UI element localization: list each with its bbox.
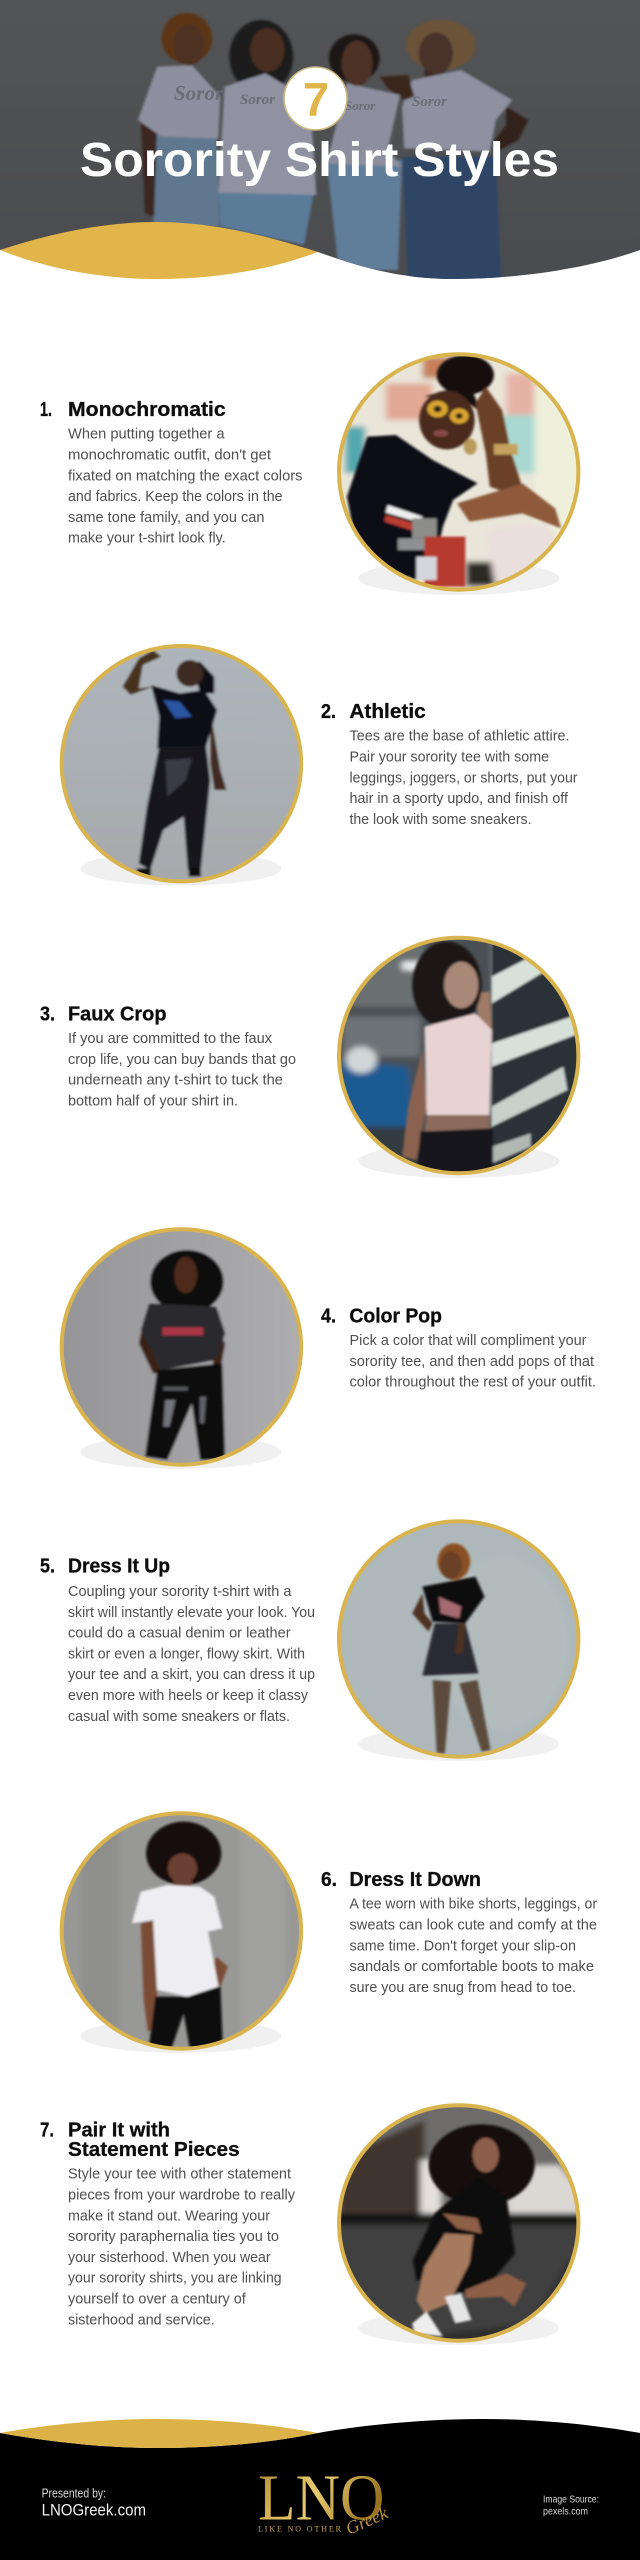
panel: 2 Athletic xyxy=(53,640,578,890)
text block: A tee worn with bike shorts, leggings, or xyxy=(350,1897,597,1913)
text block: sisterhood and service. xyxy=(68,2312,215,2328)
heading: Dress It Down xyxy=(349,1869,481,1891)
shirt lettering xyxy=(174,86,447,110)
panel: 3 Faux Crop xyxy=(40,923,594,1183)
text block: sorority tee, and then add pops of that xyxy=(350,1354,594,1370)
image source: Image Source: xyxy=(543,2494,599,2506)
heading: 4. xyxy=(321,1306,336,1328)
text block: skirt or even a longer, flowy skirt. With xyxy=(68,1646,305,1662)
badge: number 7 xyxy=(284,67,347,130)
heading: Statement Pieces xyxy=(68,2139,240,2161)
panel: 1 Monochromatic xyxy=(40,343,596,600)
text block: sorority paraphernalia ties you to xyxy=(68,2229,279,2245)
text block xyxy=(350,1897,597,1996)
presented by: LNOGreek.com xyxy=(42,2502,146,2520)
shirt lettering: Soror xyxy=(345,98,376,113)
photo: woman flexing xyxy=(53,640,310,890)
text block: monochromatic outfit, don't get xyxy=(68,448,271,464)
heading: Monochromatic xyxy=(68,399,226,421)
heading: Faux Crop xyxy=(68,1004,166,1026)
woman 3 xyxy=(327,34,414,270)
heading: 5. xyxy=(40,1556,55,1578)
shirt lettering: Soror xyxy=(412,94,447,110)
footer panel xyxy=(0,2419,640,2560)
heading: Color Pop xyxy=(349,1306,442,1328)
logo: LNO xyxy=(258,2461,384,2534)
gold wave xyxy=(0,222,318,279)
text block: yourself to over a century of xyxy=(68,2292,247,2308)
text block: Pick a color that will compliment your xyxy=(350,1333,587,1349)
heading xyxy=(40,2120,240,2161)
header photo: four women in shirts xyxy=(0,0,640,290)
title: Sorority Shirt Styles xyxy=(80,134,559,187)
text block: and fabrics. Keep the colors in the xyxy=(68,489,282,505)
text block: bottom half of your shirt in. xyxy=(68,1093,238,1109)
heading: 6. xyxy=(321,1869,337,1891)
photo: woman in fringe skirt xyxy=(337,1519,580,1761)
shirt lettering: Soror xyxy=(240,92,275,108)
text block: even more with heels or keep it classy xyxy=(68,1688,309,1704)
text block xyxy=(68,1031,296,1109)
text block xyxy=(350,729,578,828)
panel: 5 Dress It Up xyxy=(40,1510,596,1767)
text block: same time. Don't forget your slip-on xyxy=(350,1938,576,1954)
text block: your sisterhood. When you wear xyxy=(68,2250,271,2266)
heading: Dress It Up xyxy=(68,1556,170,1578)
woman 1 xyxy=(138,13,220,227)
text block: hair in a sporty updo, and finish off xyxy=(350,791,569,807)
footer gold wave xyxy=(0,2419,318,2448)
heading: 1. xyxy=(40,399,52,421)
text block: sweats can look cute and comfy at the xyxy=(350,1918,597,1934)
panel: 4 Color Pop xyxy=(53,1223,596,1473)
presented by: Presented by: xyxy=(42,2487,106,2501)
text block: pieces from your wardrobe to really xyxy=(68,2188,296,2204)
photo: woman in crop top xyxy=(337,936,580,1178)
text block: your sorority shirts, you are linking xyxy=(68,2271,282,2287)
heading: 7. xyxy=(40,2120,54,2142)
badge: number 7: 7 xyxy=(303,73,329,126)
heading: 3. xyxy=(40,1004,55,1026)
text block xyxy=(68,1584,315,1725)
footer background xyxy=(0,2419,640,2560)
logo: Greek xyxy=(342,2502,392,2539)
heading: 2. xyxy=(321,701,336,723)
text block: Coupling your sorority t-shirt with a xyxy=(68,1584,292,1600)
text block: skirt will instantly elevate your look. You xyxy=(68,1605,315,1621)
text block: Pair your sorority tee with some xyxy=(350,750,549,766)
panel: 7 Pair It with Statement Pieces xyxy=(40,2103,580,2345)
text block: Tees are the base of athletic attire. xyxy=(350,729,570,745)
text block: same tone family, and you can xyxy=(68,510,264,526)
photo: woman in white tee xyxy=(60,1811,304,2053)
photo: woman in sunglasses xyxy=(337,352,580,595)
text block: could do a casual denim or leather xyxy=(68,1626,291,1642)
text block: Style your tee with other statement xyxy=(68,2167,291,2183)
shirt lettering: Soror xyxy=(174,81,224,105)
text block: sandals or comfortable boots to make xyxy=(350,1959,594,1975)
photo: woman crouching in tunnel xyxy=(337,2103,580,2345)
text block: crop life, you can buy bands that go xyxy=(68,1052,296,1068)
text block: color throughout the rest of your outfit. xyxy=(350,1375,596,1391)
text block xyxy=(350,1333,596,1391)
text block xyxy=(68,2167,296,2328)
text block: your tee and a skirt, you can dress it up xyxy=(68,1667,315,1683)
text block: leggings, joggers, or shorts, put your xyxy=(350,770,578,786)
text block: casual with some sneakers or flats. xyxy=(68,1709,290,1725)
presented by xyxy=(42,2487,146,2520)
photo: woman in sequin pants xyxy=(53,1223,310,1473)
text block: underneath any t-shirt to tuck the xyxy=(68,1073,283,1089)
panel: 6 Dress It Down xyxy=(60,1811,597,2053)
text block: sure you are snug from head to toe. xyxy=(350,1980,576,1996)
text block: make your t-shirt look fly. xyxy=(68,531,226,547)
text block: fixated on matching the exact colors xyxy=(68,468,302,484)
woman 2 xyxy=(218,20,316,245)
logo: LIKE NO OTHER xyxy=(258,2525,342,2534)
text block: the look with some sneakers. xyxy=(350,812,532,828)
text block: When putting together a xyxy=(68,427,225,443)
text block: If you are committed to the faux xyxy=(68,1031,273,1047)
text block xyxy=(68,427,302,547)
heading: Athletic xyxy=(349,701,426,723)
image source: pexels.com xyxy=(543,2505,588,2517)
text block: make it stand out. Wearing your xyxy=(68,2208,270,2224)
header panel xyxy=(0,0,640,290)
woman 4 xyxy=(402,20,529,283)
heading: Pair It with xyxy=(68,2120,170,2142)
image source xyxy=(543,2494,599,2517)
